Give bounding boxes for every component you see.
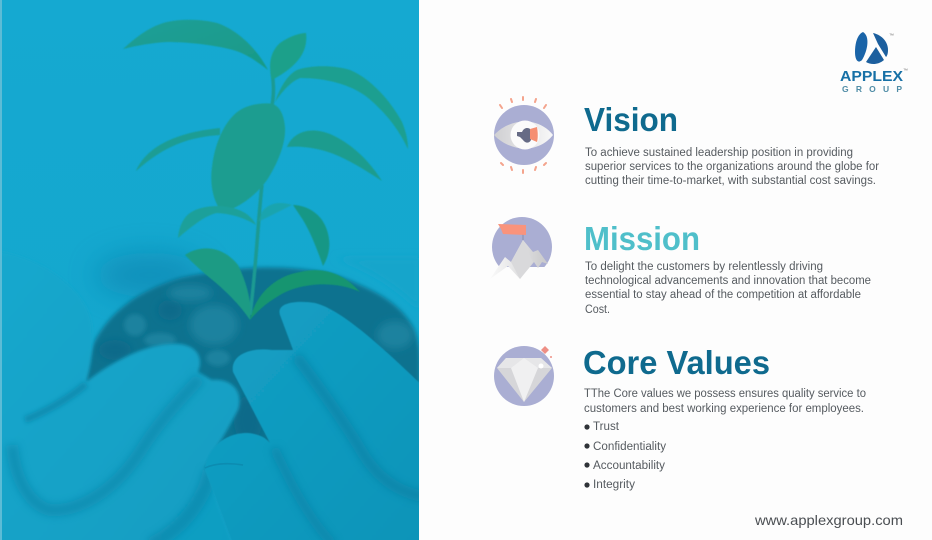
logo: Applex Group: ™ <box>903 68 908 74</box>
logo: Applex Group <box>840 32 908 94</box>
text: core values statement: customers and best working experience for employees. <box>584 403 864 415</box>
website url: www.applexgroup.com <box>754 512 903 528</box>
right hand finger creases <box>205 356 425 540</box>
text: vision statement: superior services to the organizations around the globe for <box>585 161 879 173</box>
heading: Core Values: Core Values <box>583 344 770 381</box>
text: mission statement: To delight the customers by relentlessly driving <box>585 261 823 273</box>
heading: Mission: Mission <box>584 220 700 257</box>
text: vision statement <box>585 147 879 187</box>
soil mound <box>82 258 420 470</box>
panel: photo of seedling held in hands with teal overlay <box>0 0 425 540</box>
seedling leaves and stem <box>123 20 408 320</box>
text: core values statement <box>584 388 866 415</box>
heading: Vision: Vision <box>584 101 678 138</box>
text: mission statement: essential to stay ahead of the competition at affordable <box>585 289 861 301</box>
flag <box>498 224 526 235</box>
list: core values: Integrity <box>593 479 635 491</box>
text: mission statement: Cost. <box>585 304 610 316</box>
icon: core values diamond <box>494 346 554 406</box>
text: mission statement <box>585 261 871 316</box>
logo: Applex Group: APPLEX <box>840 68 903 85</box>
left hand finger creases <box>12 378 210 540</box>
sun ticks <box>500 97 546 173</box>
text: vision statement: cutting their time-to-market, with substantial cost savings. <box>585 175 876 187</box>
list: core values <box>584 421 666 491</box>
text: core values statement: TThe Core values we possess ensures quality service to <box>584 388 866 400</box>
left hand <box>4 342 241 540</box>
right hand <box>205 302 425 540</box>
text: vision statement: To achieve sustained leadership position in providing <box>585 147 853 159</box>
icon: mission mountain with flag <box>490 217 552 279</box>
text: mission statement: technological advancements and innovation that become <box>585 275 871 287</box>
list: core values: Trust <box>593 421 620 433</box>
list: core values: Accountability <box>593 460 665 472</box>
logo mark: ™ <box>889 33 894 39</box>
list: core values: Confidentiality <box>593 441 666 453</box>
logo: Applex Group: GROUP <box>842 84 902 94</box>
icon: vision eye <box>494 97 554 173</box>
left edge highlight <box>0 0 2 540</box>
sparkle <box>541 346 549 354</box>
